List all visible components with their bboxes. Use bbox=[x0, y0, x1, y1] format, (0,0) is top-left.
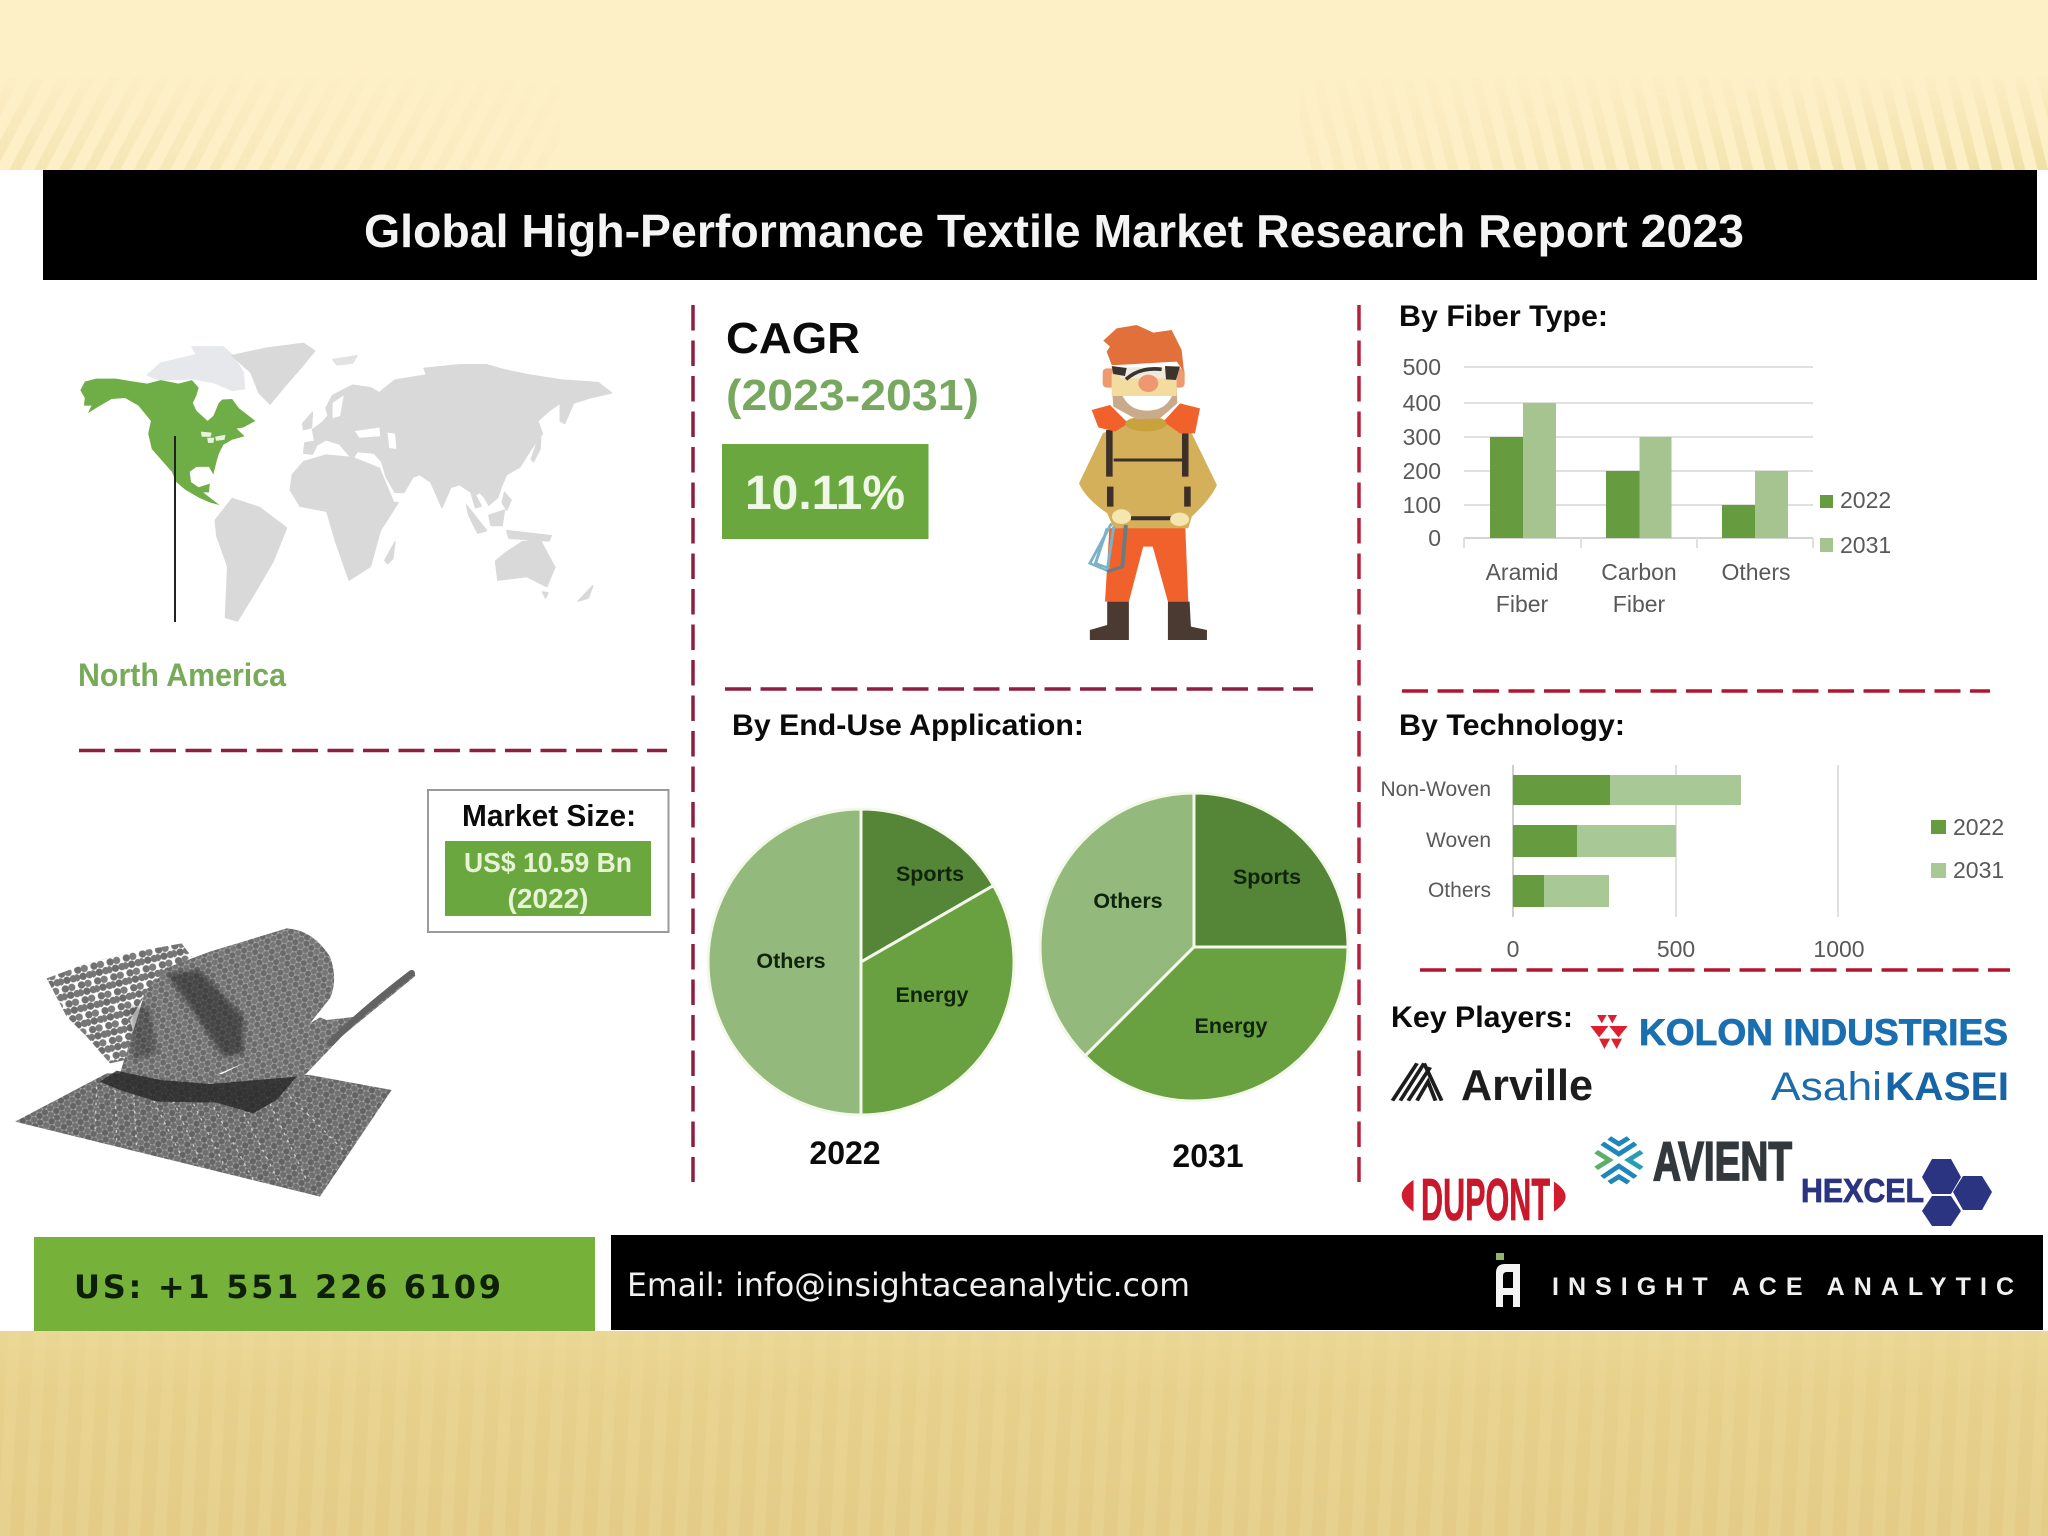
pie labels 2022: Others bbox=[756, 949, 826, 973]
legend: 2022 bbox=[1840, 487, 1891, 513]
CAGR value box: 10.11% bbox=[745, 467, 905, 520]
bar chart: by fiber type: 0 bbox=[1428, 525, 1441, 551]
market size value: US$ 10.59 Bn bbox=[464, 847, 632, 878]
logo: Avient bbox=[1596, 1130, 1792, 1192]
bar chart: by fiber type: Aramid bbox=[1486, 559, 1558, 585]
stacked bar chart: by technology: Others bbox=[1428, 879, 1491, 902]
bar chart: by fiber type: 100 bbox=[1403, 492, 1441, 518]
year label 2022: 2022 bbox=[809, 1135, 881, 1171]
highlighted North America bbox=[80, 379, 255, 505]
CAGR period: (2023-2031) bbox=[726, 371, 979, 420]
head, hair and shoulder pads bbox=[1092, 325, 1200, 433]
boots bbox=[1090, 602, 1207, 640]
phone bar bbox=[34, 1237, 595, 1331]
email address: Email: info@insightaceanalytic.com bbox=[627, 1266, 1190, 1304]
legs bbox=[1105, 527, 1188, 602]
logo: Avient: AVIENT bbox=[1653, 1130, 1792, 1192]
legend: 2031 bbox=[1953, 857, 2004, 883]
heading: Key Players: Key Players: bbox=[1391, 1001, 1573, 1034]
bar chart: by fiber type: 300 bbox=[1403, 424, 1441, 450]
backpack straps bbox=[1109, 430, 1187, 518]
legend: 2031 bbox=[1840, 532, 1891, 558]
legend bbox=[1931, 814, 2004, 883]
world map highlighting North America bbox=[80, 343, 612, 622]
brand name: INSIGHT ACE ANALYTIC bbox=[1552, 1273, 2014, 1301]
bar chart: by fiber type: 500 bbox=[1403, 354, 1441, 380]
logo: DuPont: DUPONT bbox=[1421, 1167, 1550, 1233]
stacked bar chart: by technology: 0 bbox=[1507, 936, 1519, 962]
bar chart: by fiber type bbox=[1403, 354, 1891, 617]
logo: Asahi Kasei: KASEI bbox=[1885, 1065, 2009, 1109]
email and brand bar bbox=[611, 1235, 2043, 1330]
pie labels 2022: Energy bbox=[896, 983, 968, 1007]
pie labels 2031: Others bbox=[1093, 889, 1163, 913]
torso bbox=[1079, 418, 1217, 528]
background: bottom sand band bbox=[0, 1331, 2048, 1536]
background: top cream band bbox=[0, 0, 2048, 170]
rope bbox=[1090, 523, 1114, 571]
heading: By End-Use Application: By End-Use Application: bbox=[732, 709, 1084, 742]
pie labels 2031: Energy bbox=[1195, 1014, 1267, 1038]
icon: hiker character bbox=[1079, 325, 1217, 640]
stacked bar chart: by technology: 1000 bbox=[1813, 936, 1865, 962]
CAGR heading: CAGR bbox=[726, 314, 860, 363]
bar chart: by fiber type: Fiber bbox=[1613, 591, 1666, 617]
market size box bbox=[428, 790, 668, 932]
pie chart 2031 bbox=[1040, 793, 1348, 1101]
white content panel bbox=[0, 170, 2048, 1331]
CAGR value box bbox=[722, 444, 928, 539]
logo: DuPont bbox=[1402, 1167, 1566, 1233]
pie labels 2031: Sports bbox=[1233, 865, 1301, 889]
region label: North America: North America bbox=[78, 657, 286, 693]
heading: By Fiber Type: By Fiber Type: bbox=[1399, 300, 1608, 333]
graphene sheet illustration bbox=[15, 928, 415, 1197]
bar chart: by fiber type: 200 bbox=[1403, 458, 1441, 484]
logo: Kolon Industries: KOLON INDUSTRIES bbox=[1639, 1012, 2008, 1053]
logo: Hexcel bbox=[1801, 1159, 1992, 1226]
market size value: (2022) bbox=[508, 883, 588, 914]
stacked bar chart: by technology bbox=[1380, 765, 2004, 962]
bar chart: by fiber type: Others bbox=[1721, 559, 1791, 585]
year label 2031: 2031 bbox=[1172, 1138, 1244, 1174]
icon: Insight Ace logo mark bbox=[1496, 1253, 1520, 1307]
leader line bbox=[174, 436, 176, 622]
title bar bbox=[43, 170, 2037, 280]
pie labels 2031 bbox=[1093, 865, 1301, 1038]
title: Global High-Performance Textile Market Research Report 2023 bbox=[364, 205, 1744, 257]
logo: Asahi Kasei: Asahi bbox=[1771, 1065, 1882, 1109]
bar chart: by fiber type: Fiber bbox=[1496, 591, 1549, 617]
pie chart 2022 bbox=[708, 809, 1014, 1115]
pie labels 2022 bbox=[756, 862, 968, 1007]
stacked bar chart: by technology: 500 bbox=[1657, 936, 1695, 962]
heading: By Technology: By Technology: bbox=[1399, 709, 1625, 742]
logo: Arville bbox=[1392, 1061, 1593, 1110]
pie labels 2022: Sports bbox=[896, 862, 964, 886]
stacked bar chart: by technology: Non-Woven bbox=[1380, 778, 1491, 801]
bar chart: by fiber type: Carbon bbox=[1601, 559, 1677, 585]
hands bbox=[1112, 509, 1131, 524]
bar chart: by fiber type: 400 bbox=[1403, 390, 1441, 416]
logo: Hexcel: HEXCEL bbox=[1801, 1172, 1924, 1209]
legend bbox=[1820, 487, 1891, 558]
stacked bar chart: by technology: Woven bbox=[1426, 829, 1491, 852]
phone bar: US: +1 551 226 6109 bbox=[74, 1268, 501, 1306]
logo: Asahi Kasei bbox=[1771, 1065, 2009, 1109]
legend: 2022 bbox=[1953, 814, 2004, 840]
market size value bbox=[445, 841, 651, 916]
market size heading: Market Size: bbox=[462, 798, 636, 833]
logo: Arville: Arville bbox=[1461, 1061, 1593, 1110]
